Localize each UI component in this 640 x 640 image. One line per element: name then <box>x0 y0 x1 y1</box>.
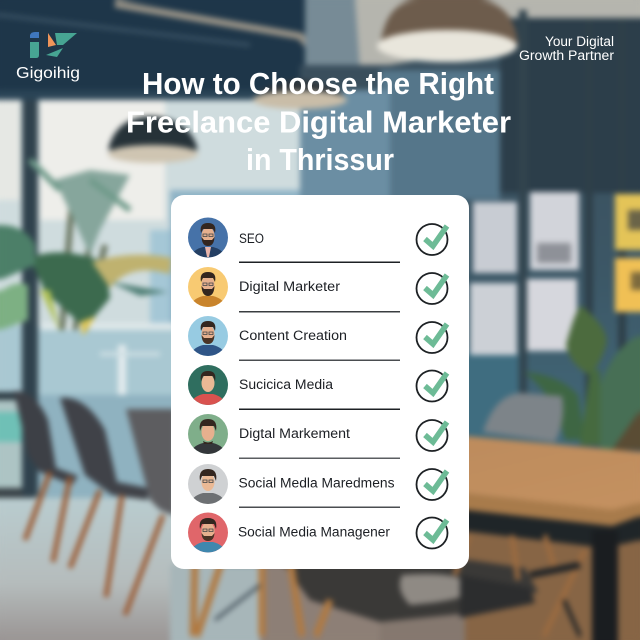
row: Digtal Markement <box>188 414 448 456</box>
icon: avatar Content Creation <box>188 316 228 358</box>
posters <box>473 202 517 273</box>
row: SEO <box>188 217 448 260</box>
row: Social Media Managener <box>188 512 448 555</box>
icon: logo mark <box>30 32 77 58</box>
icon: avatar SEO <box>188 217 228 260</box>
central column <box>305 0 380 200</box>
icon: check <box>416 224 448 255</box>
icon: check <box>416 370 448 402</box>
icon: avatar Sucicica Media <box>188 365 228 407</box>
right plant <box>566 306 607 375</box>
row: Sucicica Media <box>188 365 448 407</box>
label: SEO <box>239 231 264 246</box>
title: Freelance Digital Marketer <box>126 104 511 140</box>
icon: check <box>416 469 448 500</box>
title: How to Choose the Right <box>142 66 494 101</box>
table <box>330 436 640 510</box>
floor <box>0 498 220 640</box>
icon: avatar Digtal Markement <box>188 414 228 456</box>
logo: Gigoihig <box>16 32 80 82</box>
left plant <box>62 200 105 330</box>
icon: check <box>416 273 448 304</box>
label: Digital Marketer <box>239 279 341 294</box>
tagline: Growth Partner <box>519 48 615 63</box>
icon: avatar Social Media Managener <box>188 512 228 555</box>
icon: check <box>416 518 448 548</box>
curtained wall <box>300 65 640 445</box>
icon: avatar Digital Marketer <box>188 267 228 309</box>
label: Social Medla Maredmens <box>238 476 395 490</box>
icon: avatar Social Medla Maredmens <box>188 464 228 506</box>
left chairs <box>14 391 78 485</box>
label: Content Creation <box>239 328 347 343</box>
label: Digtal Markement <box>239 426 350 441</box>
row: Content Creation <box>188 316 448 358</box>
icon: check <box>416 420 448 451</box>
row: Social Medla Maredmens <box>188 464 448 506</box>
label: Social Media Managener <box>238 524 391 540</box>
title <box>126 66 511 177</box>
window wall <box>0 95 300 395</box>
panel: checklist card <box>171 195 469 569</box>
row: Digital Marketer <box>188 267 448 309</box>
rear chair <box>483 393 563 442</box>
logo wordmark: Gigoihig <box>16 65 80 82</box>
tagline: Your Digital <box>545 34 614 49</box>
foreground chair <box>280 560 538 622</box>
icon: check <box>416 322 448 353</box>
tagline <box>519 34 615 63</box>
title: in Thrissur <box>246 142 394 177</box>
label: Sucicica Media <box>239 377 334 392</box>
ceiling beam <box>115 4 322 100</box>
ceiling <box>0 0 320 95</box>
pendant lamps <box>380 0 518 50</box>
